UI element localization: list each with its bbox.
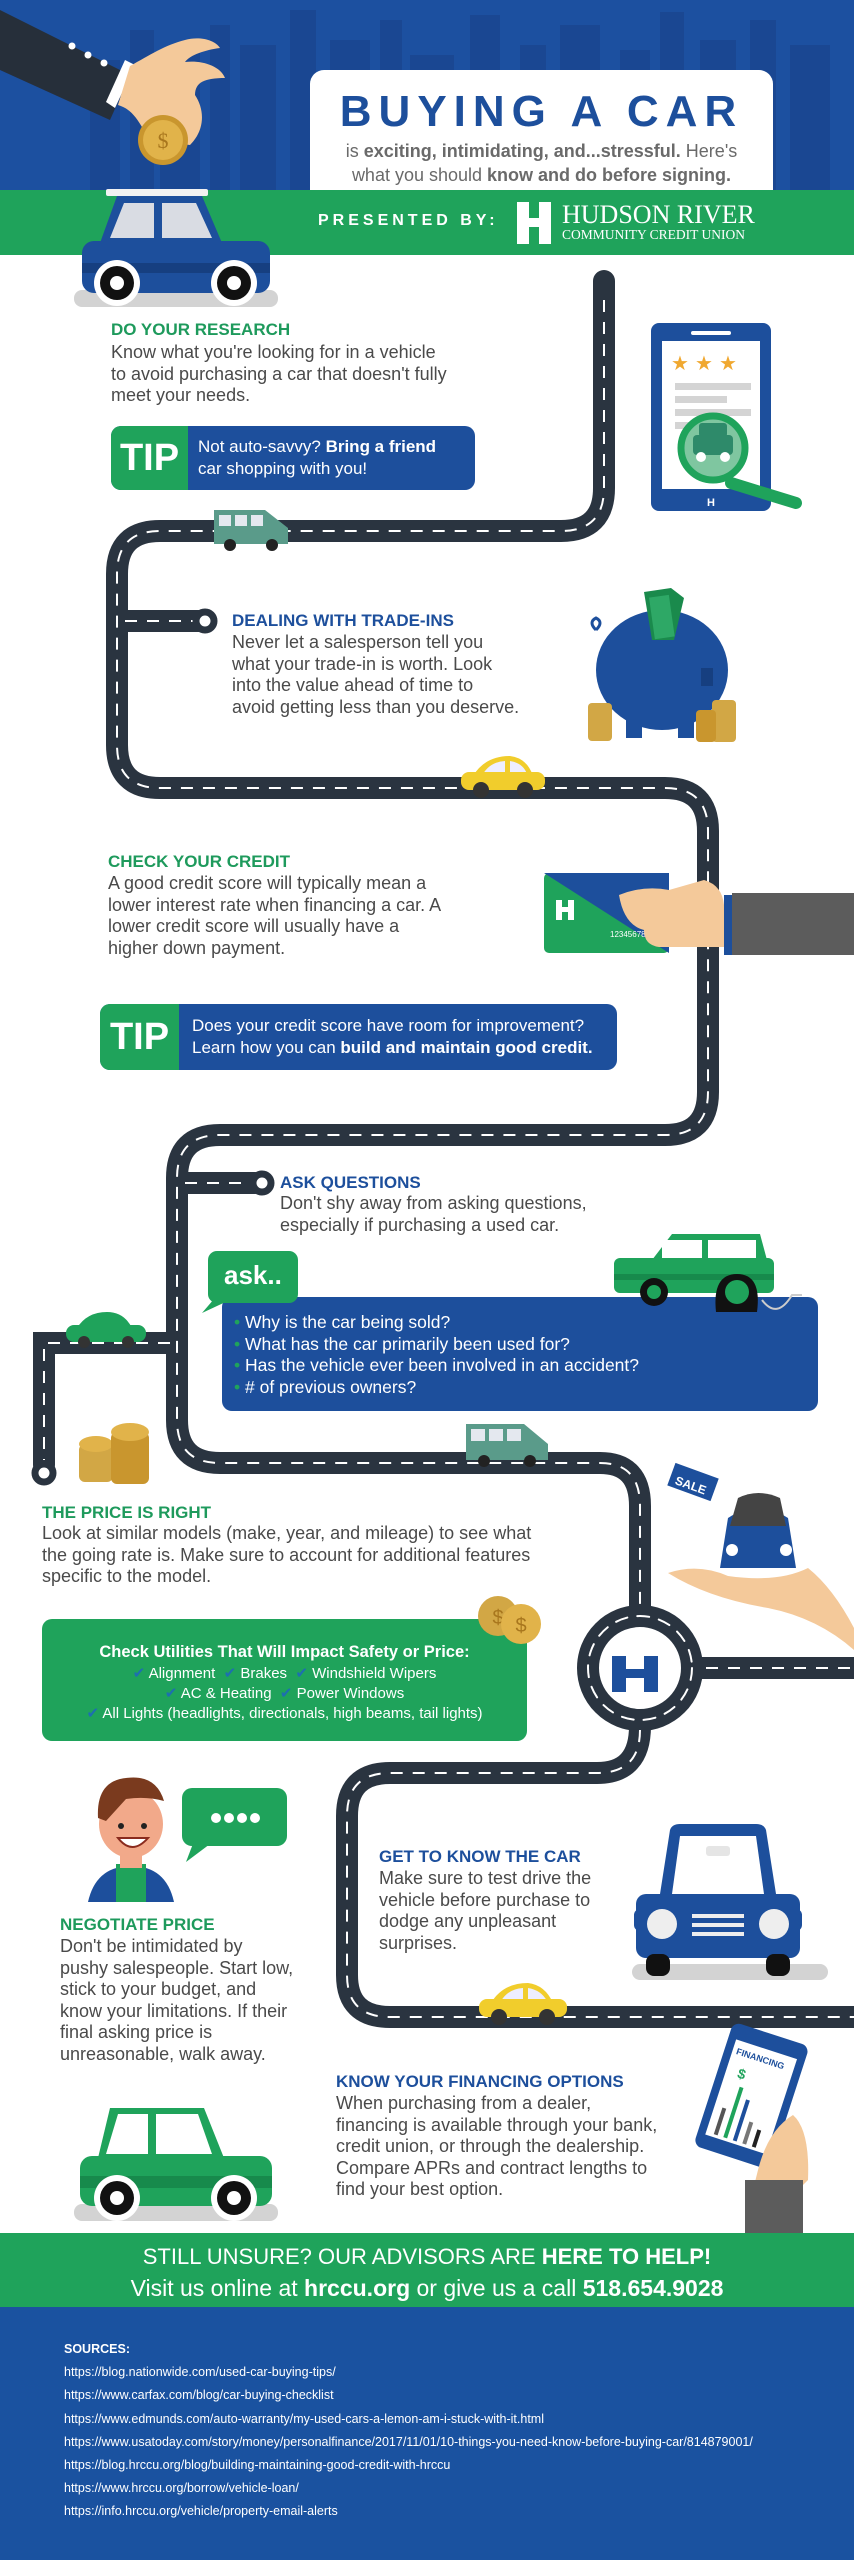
body: meet your needs. xyxy=(111,385,250,405)
body xyxy=(232,632,519,717)
questions box: • # of previous owners? xyxy=(234,1376,416,1396)
icon: blue car front xyxy=(632,1824,828,1980)
sources footer: https://www.usatoday.com/story/money/personalfinance/2017/11/01/10-things-you-need-know-before-buying-car/814879001/ xyxy=(64,2435,753,2449)
icon: yellow car 1 xyxy=(461,756,545,798)
body: know your limitations. If their xyxy=(60,2001,287,2021)
section: price is right xyxy=(42,1503,532,1586)
body: Make sure to test drive the xyxy=(379,1868,591,1888)
utilities checklist box: ✔ Alignment ✔ Brakes ✔ Windshield Wipers xyxy=(133,1665,436,1682)
call to action band: Visit us online at hrccu.org or give us a call 518.654.9028 xyxy=(131,2275,723,2301)
body: into the value ahead of time to xyxy=(232,675,473,695)
sources footer: https://blog.nationwide.com/used-car-buying-tips/ xyxy=(64,2365,336,2379)
icon: small green car xyxy=(66,1312,146,1348)
body: stick to your budget, and xyxy=(60,1979,256,1999)
icon: hand holding financing phone: FINANCING xyxy=(735,2046,786,2071)
body xyxy=(111,342,447,405)
icon: hand holding financing phone xyxy=(695,2024,808,2233)
body: A good credit score will typically mean a xyxy=(108,873,426,893)
body: Don't be intimidated by xyxy=(60,1936,243,1956)
body: the going rate is. Make sure to account for additional features xyxy=(42,1545,530,1565)
subtitle xyxy=(346,141,737,185)
header background xyxy=(0,0,854,190)
questions box xyxy=(222,1297,818,1411)
body: surprises. xyxy=(379,1933,457,1953)
body xyxy=(60,1936,293,2064)
body: Don't shy away from asking questions, xyxy=(280,1193,587,1213)
green presented-by band xyxy=(0,190,854,255)
body: When purchasing from a dealer, xyxy=(336,2093,591,2113)
logo: COMMUNITY CREDIT UNION xyxy=(562,227,745,242)
sources footer: https://www.hrccu.org/borrow/vehicle-loan/ xyxy=(64,2481,299,2495)
section: check your credit xyxy=(108,852,441,958)
icon: hand dropping coin xyxy=(0,10,225,165)
icon: phone with magnifier: ★ xyxy=(671,353,689,375)
logo: HUDSON RIVER xyxy=(562,200,755,229)
icon: phone with magnifier: ★ xyxy=(719,353,737,375)
icon: coins xyxy=(478,1596,541,1644)
body: find your best option. xyxy=(336,2179,503,2199)
icon: yellow car 2 xyxy=(479,1983,567,2025)
subtitle: is exciting, intimidating, and...stressful. Here's xyxy=(346,141,737,161)
tip box 2: TIP xyxy=(110,1016,169,1058)
body xyxy=(336,2093,657,2199)
body xyxy=(280,1193,587,1235)
icon: credit card with hand xyxy=(544,873,854,955)
utilities checklist box: Check Utilities That Will Impact Safety or Price: xyxy=(99,1643,470,1661)
ask bubble xyxy=(202,1251,298,1313)
icon: coin stacks xyxy=(79,1423,149,1484)
section: do your research xyxy=(111,320,447,405)
icon: phone with magnifier xyxy=(651,323,802,511)
body: specific to the model. xyxy=(42,1566,211,1586)
ask bubble: ask.. xyxy=(224,1260,282,1290)
utilities checklist box xyxy=(42,1619,527,1741)
sources footer: SOURCES: xyxy=(64,2342,130,2356)
tip box 2: Does your credit score have room for improvement? xyxy=(192,1016,584,1035)
heading: DO YOUR RESEARCH xyxy=(111,320,290,339)
tip box 2 xyxy=(100,1004,617,1070)
body: Know what you're looking for in a vehicle xyxy=(111,342,436,362)
section: trade-ins xyxy=(232,611,519,717)
icon: van 2 xyxy=(466,1424,548,1467)
heading: CHECK YOUR CREDIT xyxy=(108,852,290,871)
icon: phone with magnifier: H xyxy=(707,497,715,509)
body xyxy=(379,1868,591,1953)
tip box 1 xyxy=(111,426,475,490)
heading: KNOW YOUR FINANCING OPTIONS xyxy=(336,2072,624,2091)
body: Look at similar models (make, year, and mileage) to see what xyxy=(42,1523,531,1543)
body: credit union, or through the dealership. xyxy=(336,2136,644,2156)
icon: hand holding car with sale tag xyxy=(667,1462,854,1650)
heading: THE PRICE IS RIGHT xyxy=(42,1503,211,1522)
icon: coins: $ xyxy=(515,1615,527,1637)
call to action band xyxy=(0,2233,854,2307)
icon: green car with flat tire xyxy=(614,1234,802,1312)
icon: hand holding financing phone: $ xyxy=(736,2065,748,2083)
sources footer: https://www.carfax.com/blog/car-buying-checklist xyxy=(64,2388,334,2402)
utilities checklist box: ✔ All Lights (headlights, directionals, high beams, tail lights) xyxy=(86,1705,483,1722)
icon: person with speech bubble xyxy=(88,1778,287,1902)
body: pushy salespeople. Start low, xyxy=(60,1958,293,1978)
body: higher down payment. xyxy=(108,938,285,958)
body: lower interest rate when financing a car. A xyxy=(108,895,441,915)
icon: hand holding car with sale tag: SALE xyxy=(673,1473,708,1497)
body: Compare APRs and contract lengths to xyxy=(336,2158,647,2178)
logo xyxy=(517,200,755,244)
questions box: • Has the vehicle ever been involved in an accident? xyxy=(234,1355,639,1375)
icon: credit card with hand: 123456789 xyxy=(610,930,651,939)
icon: green car bottom xyxy=(74,2108,278,2221)
body: especially if purchasing a used car. xyxy=(280,1215,559,1235)
heading: NEGOTIATE PRICE xyxy=(60,1915,215,1934)
body: Never let a salesperson tell you xyxy=(232,632,483,652)
body: lower credit score will usually have a xyxy=(108,916,399,936)
body: financing is available through your bank, xyxy=(336,2115,657,2135)
body xyxy=(42,1523,532,1586)
section: financing options xyxy=(336,2072,657,2199)
heading: DEALING WITH TRADE-INS xyxy=(232,611,454,630)
body: to avoid purchasing a car that doesn't fully xyxy=(111,364,447,384)
heading: GET TO KNOW THE CAR xyxy=(379,1847,581,1866)
utilities checklist box: ✔ AC & Heating ✔ Power Windows xyxy=(165,1685,404,1702)
body: final asking price is xyxy=(60,2022,212,2042)
icon: blue car top xyxy=(74,189,278,307)
call to action band: STILL UNSURE? OUR ADVISORS ARE HERE TO HELP! xyxy=(143,2244,711,2269)
body: vehicle before purchase to xyxy=(379,1890,590,1910)
body: what your trade-in is worth. Look xyxy=(232,654,492,674)
icon: hand dropping coin: $ xyxy=(158,128,168,153)
body: unreasonable, walk away. xyxy=(60,2044,266,2064)
tip box 1: TIP xyxy=(120,437,179,479)
tip box 1: Not auto-savvy? Bring a friend xyxy=(198,437,436,456)
presented by text: PRESENTED BY: xyxy=(318,212,499,229)
questions box: • What has the car primarily been used for? xyxy=(234,1334,570,1354)
sources footer: https://www.edmunds.com/auto-warranty/my-used-cars-a-lemon-am-i-stuck-with-it.html xyxy=(64,2412,544,2426)
icon: phone with magnifier: ★ xyxy=(695,353,713,375)
subtitle: what you should know and do before signing. xyxy=(352,165,731,185)
title box xyxy=(310,70,773,195)
body xyxy=(108,873,441,958)
section: ask questions xyxy=(280,1173,587,1235)
tip box 2: Learn how you can build and maintain good credit. xyxy=(192,1038,593,1057)
tip box 1: car shopping with you! xyxy=(198,459,367,478)
questions box: • Why is the car being sold? xyxy=(234,1312,450,1332)
body: dodge any unpleasant xyxy=(379,1911,556,1931)
sources footer: https://blog.hrccu.org/blog/building-maintaining-good-credit-with-hrccu xyxy=(64,2458,450,2472)
section: negotiate price xyxy=(60,1915,293,2064)
body: avoid getting less than you deserve. xyxy=(232,697,519,717)
sources footer xyxy=(0,2307,854,2560)
icon: piggy bank xyxy=(588,588,736,742)
section: get to know the car xyxy=(379,1847,591,1953)
heading: ASK QUESTIONS xyxy=(280,1173,421,1192)
sources footer: https://info.hrccu.org/vehicle/property-email-alerts xyxy=(64,2504,338,2518)
icon: coins: $ xyxy=(492,1607,504,1629)
icon: van 1 xyxy=(214,510,288,551)
title: BUYING A CAR xyxy=(340,87,743,136)
